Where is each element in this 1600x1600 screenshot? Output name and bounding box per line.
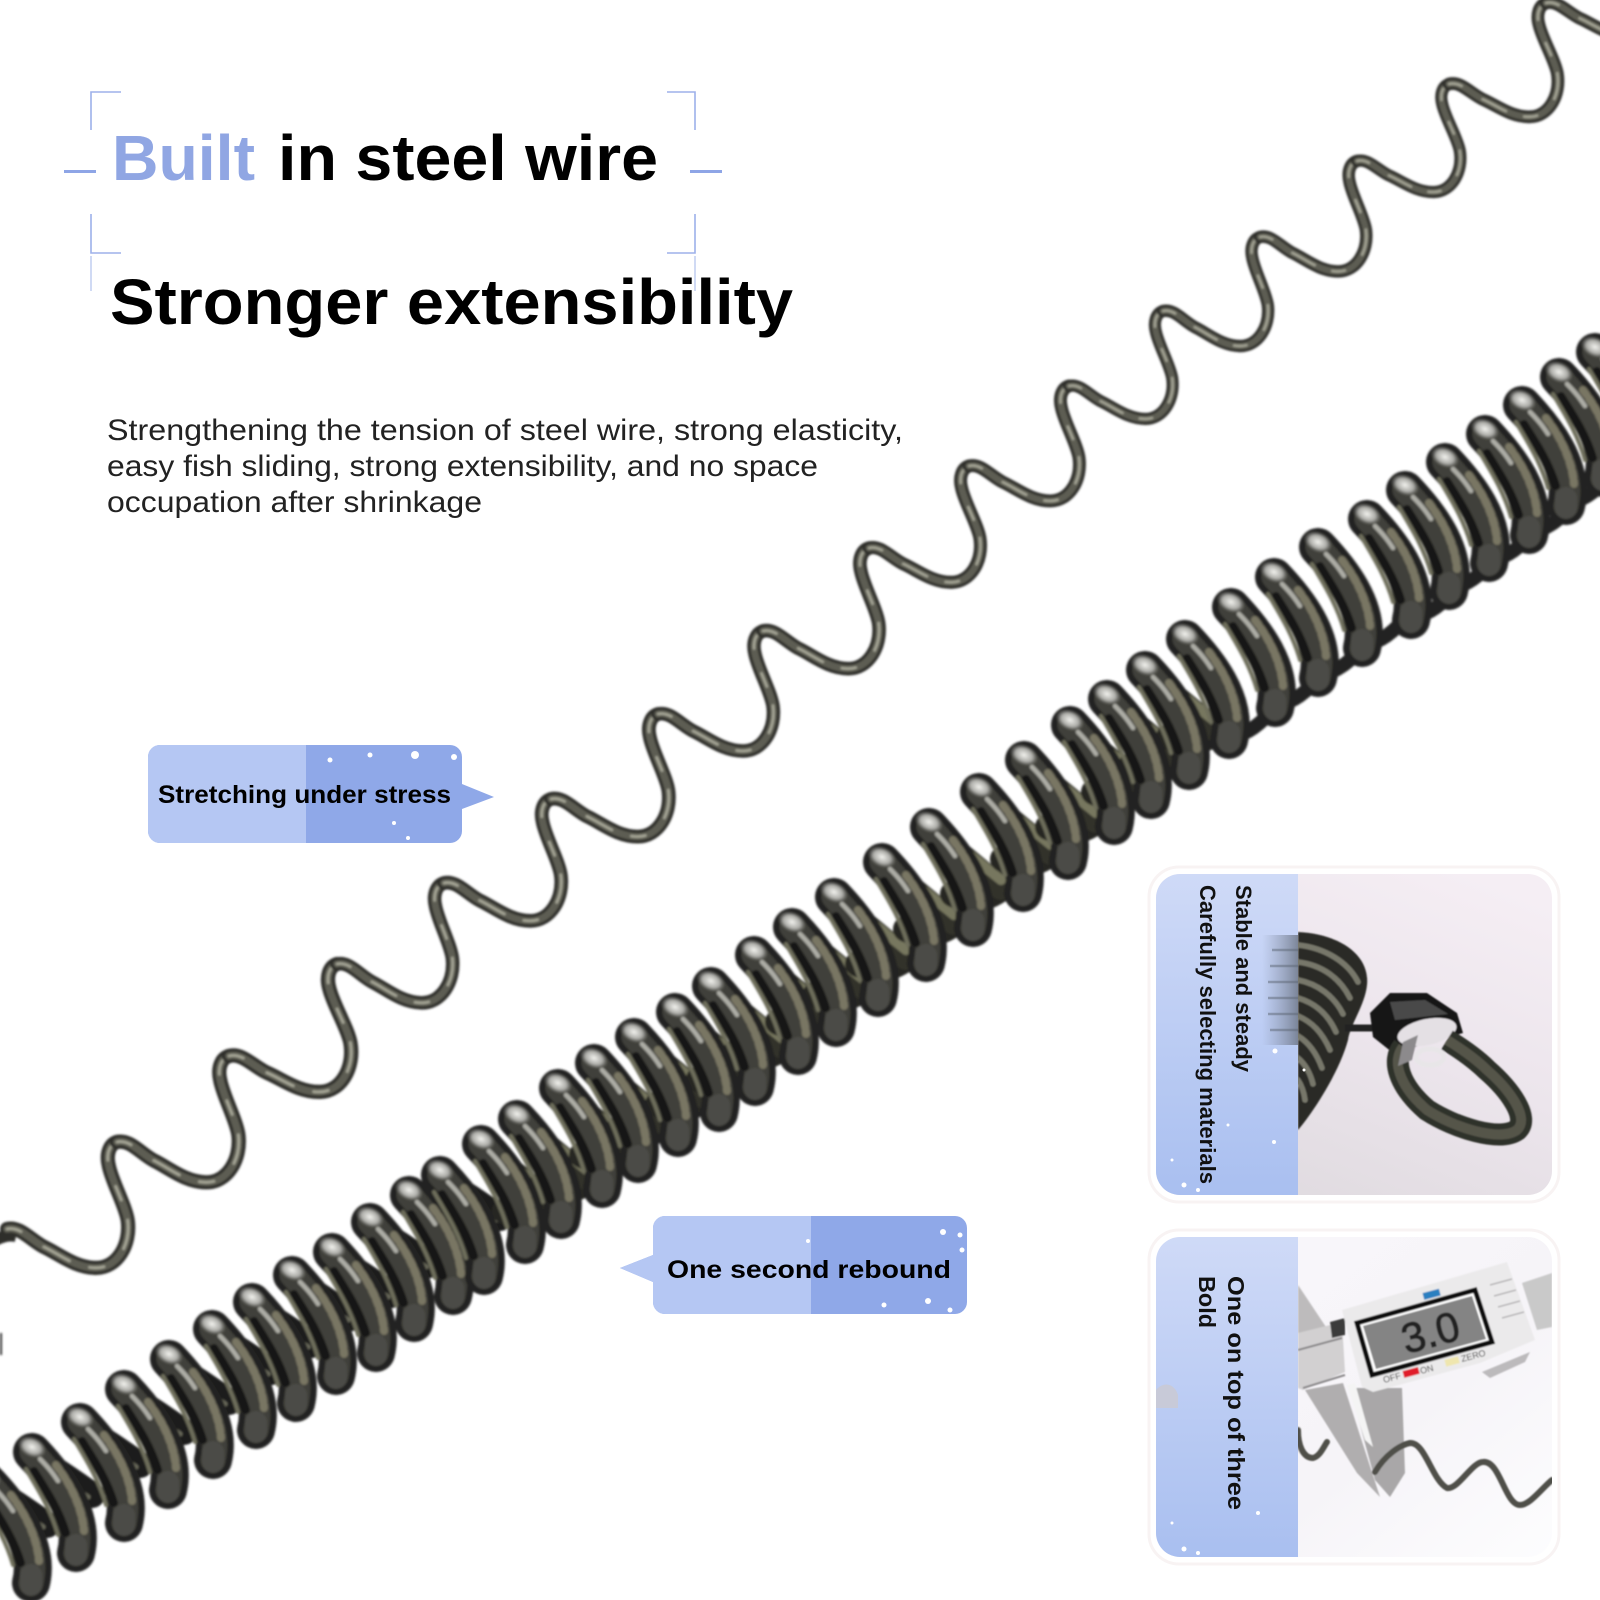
title line one: in steel wire xyxy=(278,122,658,194)
description text: occupation after shrinkage xyxy=(107,486,482,519)
title line one xyxy=(112,122,658,194)
title line one: Built xyxy=(112,122,255,194)
vertical label: one on top of three: One on top of three xyxy=(1223,1276,1249,1510)
panel: one on top of three xyxy=(1149,1230,1559,1564)
photo: caliper measuring wire: ZERO xyxy=(1460,1348,1487,1364)
compressed spring coil xyxy=(0,332,1600,1585)
photo: caliper measuring wire: OFF xyxy=(1382,1370,1402,1385)
callout: stretching under stress: Stretching under stress xyxy=(158,781,451,809)
callout: one second rebound: One second rebound xyxy=(667,1256,951,1284)
photo: caliper measuring wire: ON xyxy=(1419,1363,1435,1376)
description text xyxy=(107,414,903,519)
description text: Strengthening the tension of steel wire, strong elasticity, xyxy=(107,414,903,447)
photo: caliper measuring wire: 3.0 xyxy=(1396,1302,1465,1363)
vertical label: bold: Bold xyxy=(1194,1276,1220,1328)
callout: one second rebound xyxy=(620,1216,967,1314)
callout: stretching under stress xyxy=(148,745,494,843)
vertical label: stable and steady: Stable and steady xyxy=(1231,885,1256,1073)
title line two: Stronger extensibility xyxy=(110,266,793,338)
description text: easy fish sliding, strong extensibility, and no space xyxy=(107,450,818,483)
vertical label: carefully selecting materials: Carefully selecting materials xyxy=(1195,885,1220,1184)
title frame brackets xyxy=(64,92,722,291)
photo: caliper measuring wire xyxy=(1156,1237,1552,1557)
panel: stable and steady xyxy=(1149,867,1559,1202)
photo: ring end of spring xyxy=(1156,874,1552,1195)
